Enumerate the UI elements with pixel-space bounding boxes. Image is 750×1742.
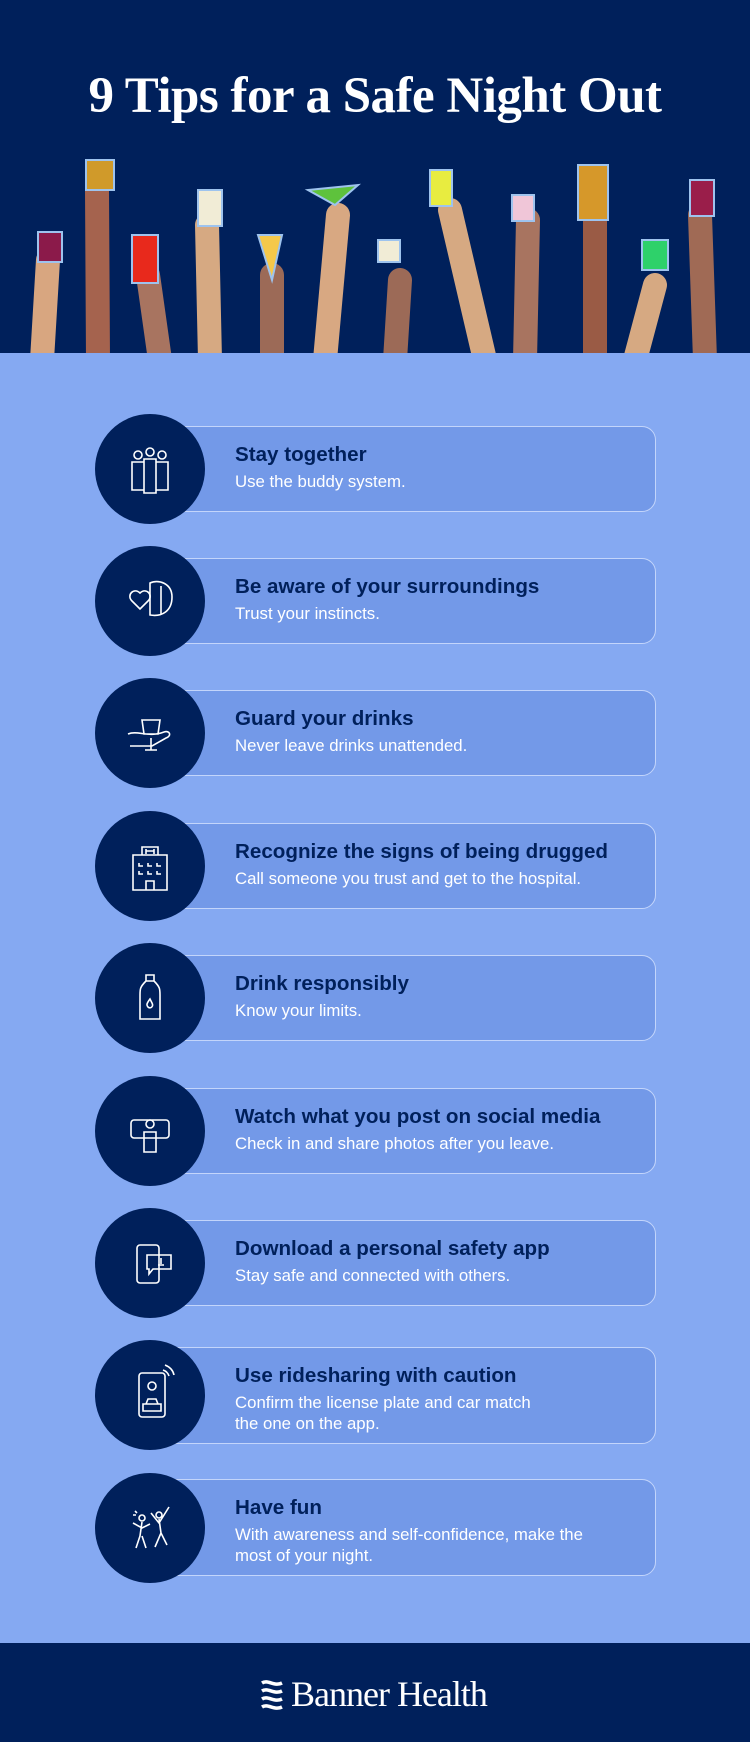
tip 4 card: Call someone you trust and get to the hospital. <box>235 869 581 888</box>
tip 9 card: most of your night. <box>235 1546 373 1565</box>
tip 5 card: Know your limits. <box>235 1001 362 1020</box>
icon: dancing people <box>95 1473 205 1583</box>
tip 6 card <box>160 1088 656 1174</box>
tip 4 card: Recognize the signs of being drugged <box>235 840 608 863</box>
tip 3 card <box>160 690 656 776</box>
icon: selfie phone <box>95 1076 205 1186</box>
tip 2 card: Trust your instincts. <box>235 604 380 623</box>
tip 3 card: Never leave drinks unattended. <box>235 736 467 755</box>
icon: water bottle <box>95 943 205 1053</box>
tip 1 card: Use the buddy system. <box>235 472 406 491</box>
tip 4 card <box>160 823 656 909</box>
tip 6 card: Check in and share photos after you leave. <box>235 1134 554 1153</box>
icon: brain and heart <box>95 546 205 656</box>
tip 3 card: Guard your drinks <box>235 707 414 730</box>
tip 9 card: Have fun <box>235 1496 322 1519</box>
tip 8 card: Use ridesharing with caution <box>235 1364 516 1387</box>
icon: people <box>95 414 205 524</box>
title: 9 Tips for a Safe Night Out <box>88 68 662 124</box>
icon: hospital <box>95 811 205 921</box>
tip 8 card <box>160 1347 656 1444</box>
tip 5 card: Drink responsibly <box>235 972 409 995</box>
tip 2 card <box>160 558 656 644</box>
tip 9 card: With awareness and self-confidence, make the <box>235 1525 583 1544</box>
icon: hand with glass <box>95 678 205 788</box>
tip 9 card <box>160 1479 656 1576</box>
footer <box>0 1643 750 1742</box>
tip 8 card: Confirm the license plate and car match <box>235 1393 531 1412</box>
icon: rideshare phone <box>95 1340 205 1450</box>
tip 6 card: Watch what you post on social media <box>235 1105 600 1128</box>
tip 1 card <box>160 426 656 512</box>
tip 1 card: Stay together <box>235 443 367 466</box>
logo: Banner Health: Banner Health <box>291 1674 487 1714</box>
icon: phone with alert <box>95 1208 205 1318</box>
tip 7 card <box>160 1220 656 1306</box>
illustration: raised hands with drinks <box>30 159 717 353</box>
tip 7 card: Download a personal safety app <box>235 1237 550 1260</box>
tip 8 card: the one on the app. <box>235 1414 380 1433</box>
header panel <box>0 0 750 353</box>
tip 7 card: Stay safe and connected with others. <box>235 1266 510 1285</box>
tip 2 card: Be aware of your surroundings <box>235 575 539 598</box>
tip 5 card <box>160 955 656 1041</box>
